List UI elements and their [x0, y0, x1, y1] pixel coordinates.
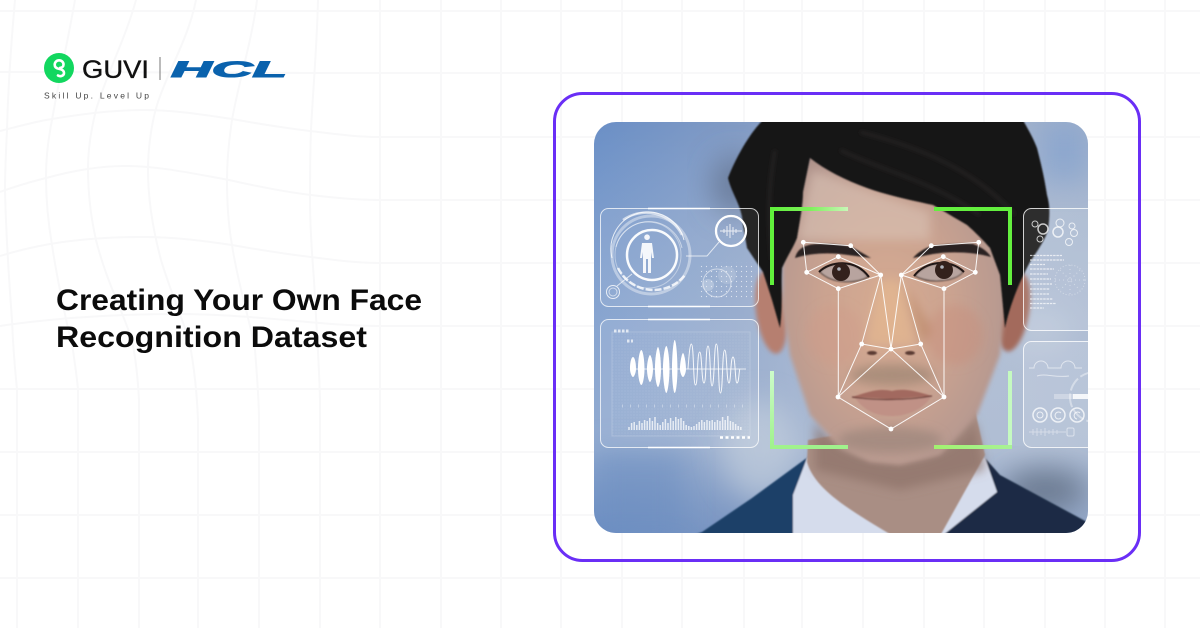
- barcode strip: [1054, 394, 1088, 399]
- eyebrows: [795, 244, 991, 258]
- title: Creating Your Own Face: [56, 284, 422, 317]
- list rows: [1030, 256, 1064, 308]
- face landmark mesh: [801, 240, 981, 431]
- HUD panel: data list: [1023, 208, 1088, 331]
- chin shadow: [815, 420, 985, 490]
- HUD panel: body scan: [600, 208, 758, 306]
- rings cluster: [1032, 219, 1078, 246]
- small header marks: [614, 331, 633, 341]
- dotted radar: [701, 266, 752, 298]
- circular body scanner: [606, 212, 719, 298]
- hair: [728, 120, 1049, 328]
- ring with wave: [716, 216, 746, 246]
- large arc: [1069, 372, 1088, 422]
- ears: [750, 268, 1036, 356]
- hair highlights: [769, 132, 1008, 238]
- filled wave: [630, 340, 686, 393]
- panel: purple frame: [554, 94, 1140, 560]
- GUVI wordmark: GUVI: [82, 56, 149, 84]
- title: [56, 284, 422, 354]
- nose and cheek shading: [839, 282, 978, 454]
- mouth: [852, 390, 932, 416]
- tick row: [622, 404, 750, 408]
- HCL wordmark: HCL: [171, 57, 287, 82]
- face: [782, 150, 1006, 465]
- neck: [807, 410, 985, 536]
- axis line: [636, 368, 746, 370]
- eyes: [819, 261, 964, 282]
- nostrils: [867, 351, 915, 355]
- logo divider: [160, 57, 161, 80]
- suit and shirt: [697, 458, 1086, 533]
- forehead highlight: [798, 170, 930, 240]
- HUD panel: gauges: [1023, 341, 1088, 448]
- small icon row: [720, 436, 750, 439]
- body silhouette icon: [640, 234, 654, 273]
- outline wave: [688, 344, 740, 393]
- dotted sphere: [1055, 265, 1085, 295]
- bottom wave: [1029, 428, 1066, 436]
- tagline: Skill Up. Level Up: [44, 90, 149, 100]
- ring row: [1033, 408, 1084, 422]
- arc gauges: [1029, 361, 1082, 376]
- photo background: [594, 122, 1088, 540]
- green scan brackets: [772, 209, 1012, 447]
- panel: face scan photo: [594, 120, 1120, 540]
- bar chart: [629, 416, 741, 430]
- logo: GUVI and HCL: [44, 53, 287, 100]
- icon: GUVI green circle: [44, 53, 74, 83]
- HUD panel: waveform: [600, 320, 758, 448]
- inner chart area: [612, 332, 750, 436]
- title: Recognition Dataset: [56, 321, 367, 354]
